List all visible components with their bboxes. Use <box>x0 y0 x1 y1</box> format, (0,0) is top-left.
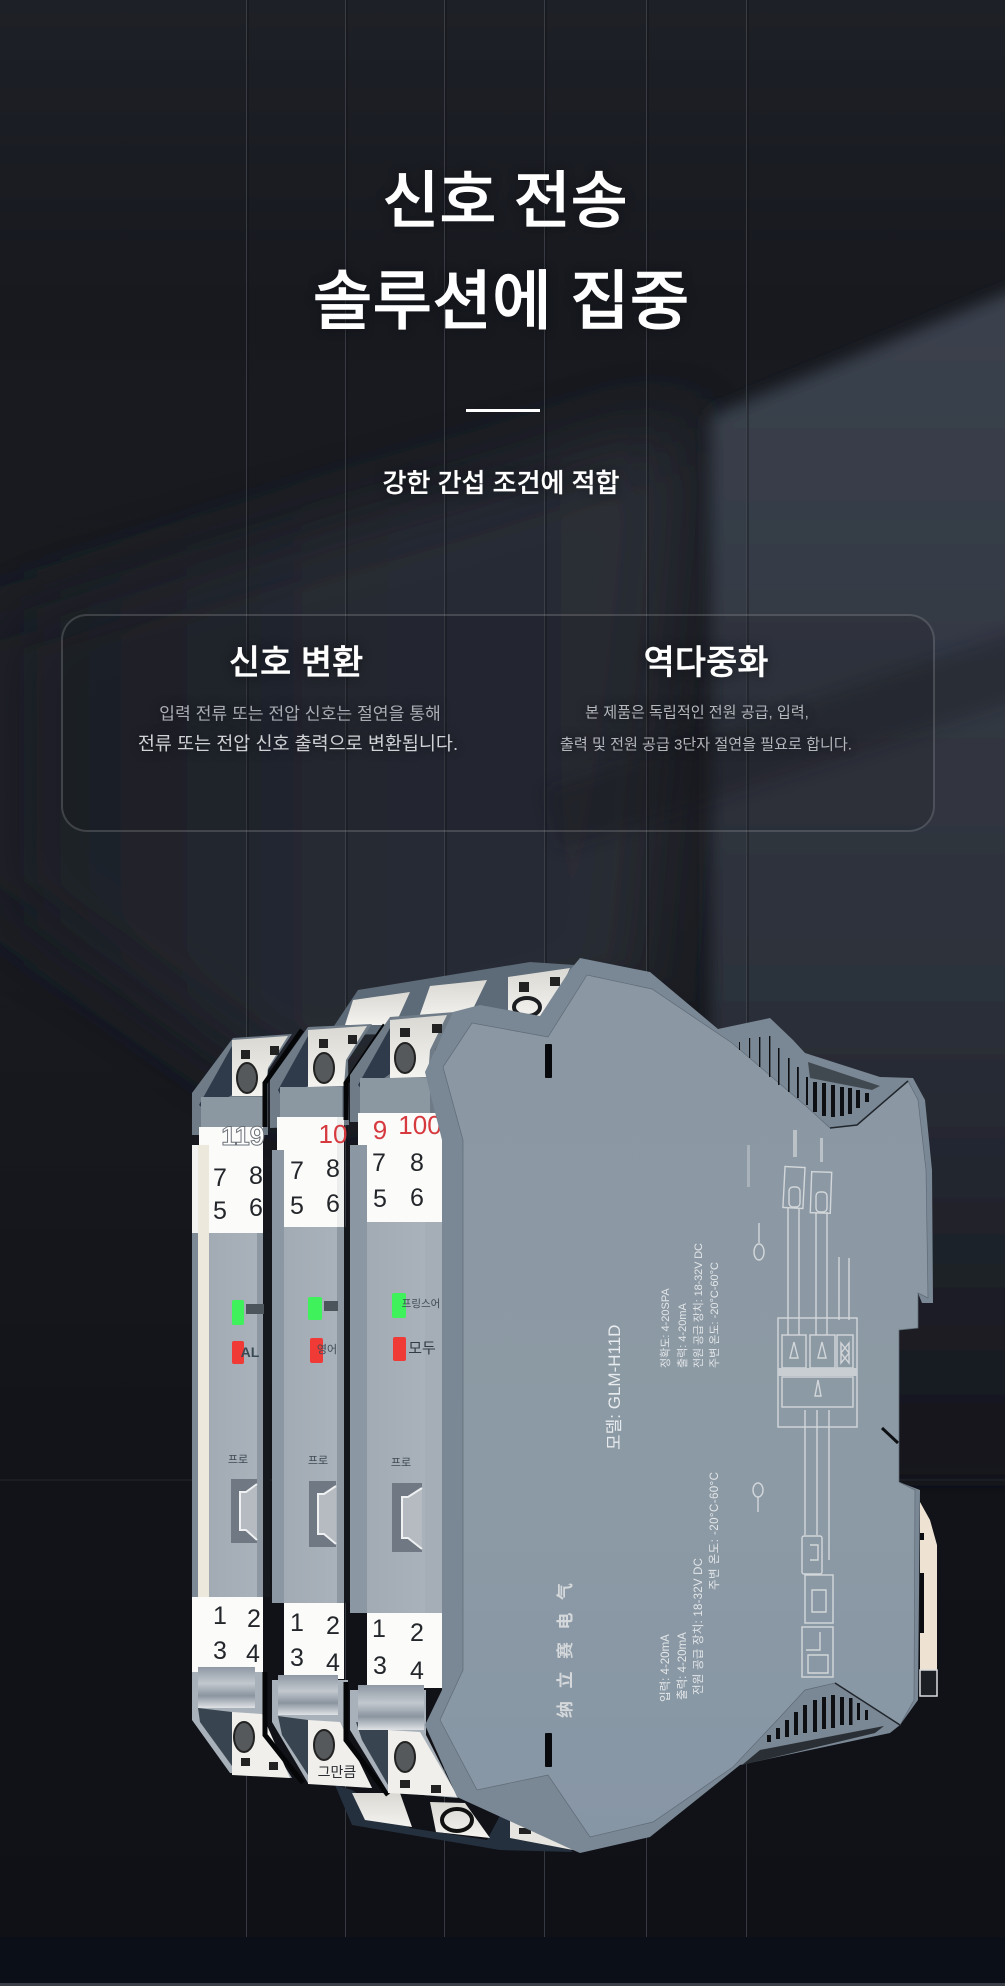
feature heading: demultiplexing: 역다중화 <box>643 644 769 682</box>
feature text: signal conversion line 2: 전류 또는 전압 신호 출력으로 변환됩니다. <box>138 733 458 754</box>
module 1: AL <box>241 1344 260 1360</box>
module 2 terminal numbers <box>290 1155 340 1677</box>
lower vents <box>767 1695 868 1742</box>
module 1 terminal numbers: 3 <box>213 1637 227 1665</box>
slots <box>545 1044 552 1767</box>
module 1 <box>192 1030 303 1783</box>
module 1 terminal numbers <box>213 1162 263 1668</box>
module 2 terminal numbers: 8 <box>326 1155 340 1183</box>
module 1 terminal numbers: 4 <box>246 1640 260 1668</box>
module 3 terminal numbers: 3 <box>373 1652 387 1680</box>
module 1: 119 <box>221 1121 265 1151</box>
module 2 terminal numbers: 2 <box>326 1612 340 1640</box>
module 3 terminal numbers: 6 <box>410 1184 424 1212</box>
module 3 terminal numbers: 4 <box>410 1657 424 1685</box>
side face of front module <box>425 958 933 1853</box>
module 1: 프로 <box>228 1454 248 1466</box>
module 1 terminal numbers: 7 <box>213 1164 227 1192</box>
module 2: 10 <box>319 1119 347 1149</box>
module 2: 그만큼 <box>318 1764 356 1780</box>
module 3 terminal numbers: 5 <box>373 1185 387 1213</box>
module 3 terminal numbers: 8 <box>410 1149 424 1177</box>
module 2 <box>270 1024 388 1795</box>
title line 1: 신호 전송 <box>382 167 628 236</box>
module 2 terminal numbers: 7 <box>290 1157 304 1185</box>
spec text lower <box>659 1472 721 1702</box>
module 1 terminal numbers: 5 <box>213 1197 227 1225</box>
module 2 terminal numbers: 6 <box>326 1190 340 1218</box>
module 3: 100 <box>398 1110 442 1140</box>
module 1 terminal numbers: 6 <box>249 1194 263 1222</box>
module 1 terminal numbers: 8 <box>249 1162 263 1190</box>
module 2 terminal numbers: 5 <box>290 1192 304 1220</box>
feature text: demultiplexing line 1: 본 제품은 독립적인 전원 공급, 입력, <box>585 704 809 721</box>
module 2 terminal numbers: 4 <box>326 1649 340 1677</box>
spec text upper: 전원 공급 장치: 18-32V DC <box>692 1243 705 1368</box>
module 2 terminal numbers: 3 <box>290 1644 304 1672</box>
module 3: 프로 <box>391 1457 411 1469</box>
module 2: 프로 <box>308 1455 328 1467</box>
module 2: 영어 <box>317 1343 337 1356</box>
module 1 terminal numbers: 2 <box>247 1605 261 1633</box>
title line 2: 솔루션에 집중 <box>313 264 689 338</box>
spec text upper: 정확도: 4-20SPA <box>659 1288 672 1368</box>
module 3: 모두 <box>408 1340 436 1357</box>
wiring schematic <box>753 1167 857 1677</box>
model label: 모델: GLM-H11D <box>605 1325 624 1450</box>
panel: features <box>61 614 935 832</box>
spec text lower: 주변 온도: -20°C-60°C <box>708 1472 721 1590</box>
spec text upper: 주변 온도: -20°C-60°C <box>708 1262 721 1368</box>
divider under title <box>466 409 540 412</box>
feature heading: signal conversion: 신호 변환 <box>229 644 363 682</box>
module 3 terminal numbers: 7 <box>372 1149 386 1177</box>
upper vents <box>739 1036 869 1117</box>
module 3 terminal numbers: 1 <box>372 1615 386 1643</box>
module 3 terminal numbers: 2 <box>410 1619 424 1647</box>
feature text: signal conversion line 1: 입력 전류 또는 전압 신호는 절연을 통해 <box>159 703 441 723</box>
spec text lower: 전원 공급 장치: 18-32V DC <box>691 1558 705 1695</box>
module 1 terminal numbers: 1 <box>213 1602 227 1630</box>
subtitle: 강한 간섭 조건에 적합 <box>383 468 619 498</box>
spec text upper <box>659 1243 721 1368</box>
back row of modules <box>328 962 575 1852</box>
feature text: demultiplexing line 2: 출력 및 전원 공급 3단자 절연을 필요로 합니다. <box>560 736 852 753</box>
module 3: 9 <box>373 1115 387 1145</box>
module 3: 프링스어 <box>402 1298 440 1310</box>
brand logo: 纳立赛电气 <box>551 1570 576 1718</box>
spec text lower: 출력: 4-20mA <box>676 1632 689 1700</box>
DIN rail clip at right <box>920 1502 937 1696</box>
spec text upper: 출력: 4-20mA <box>676 1302 689 1368</box>
module 2 terminal numbers: 1 <box>290 1609 304 1637</box>
spec text lower: 입력: 4-20mA <box>659 1634 672 1702</box>
module 3 terminal numbers <box>372 1149 424 1685</box>
module 3 <box>350 1012 458 1798</box>
